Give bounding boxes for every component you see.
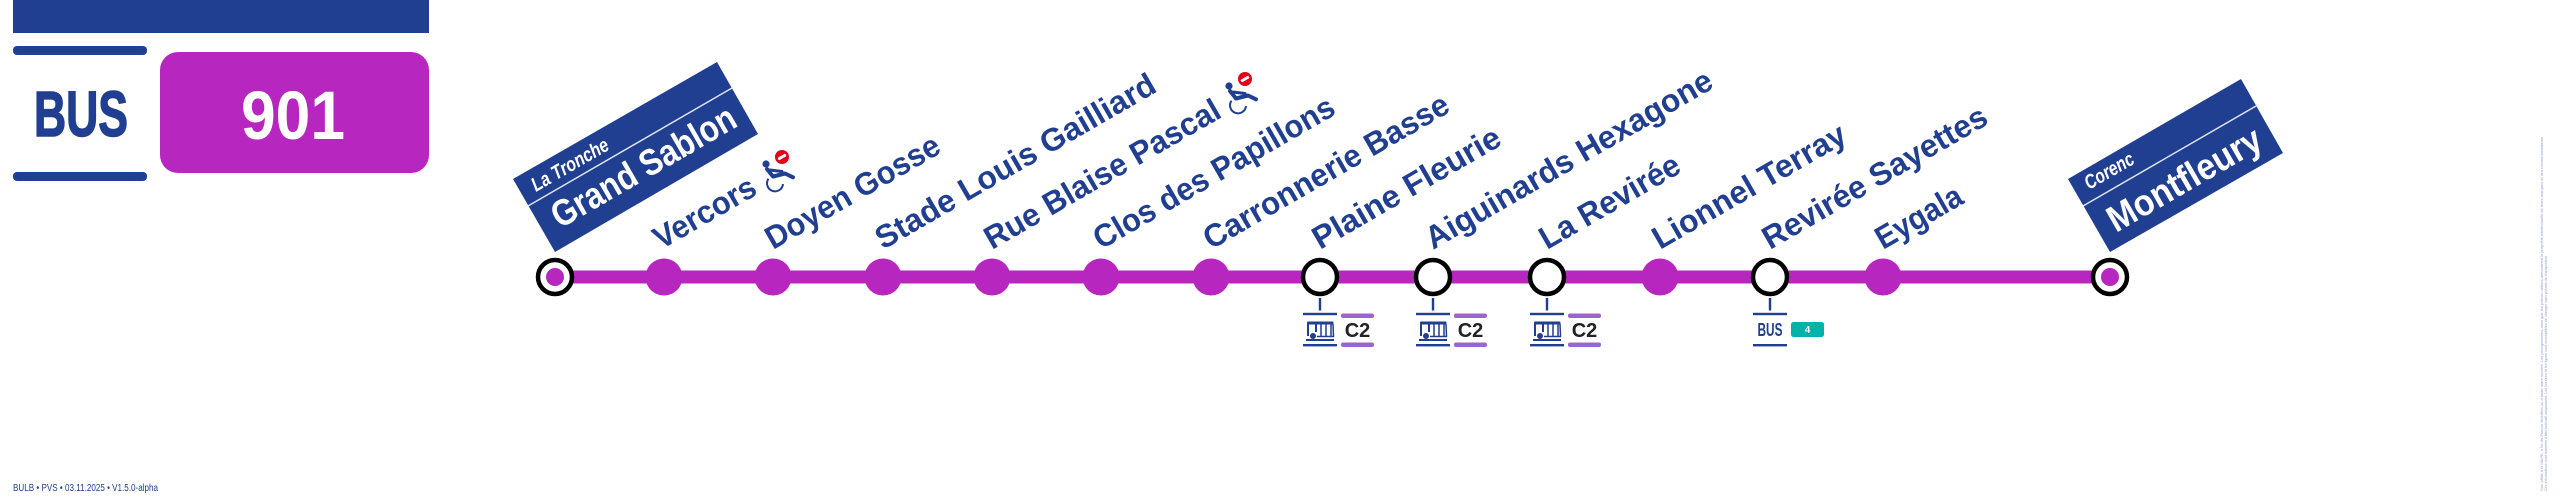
- terminus: Montfleury: [2068, 79, 2283, 252]
- icon: wheelchair not accessible, Vercors: [762, 150, 793, 191]
- route line: [555, 270, 2110, 284]
- vertical legal notice: Non affilié à la MAPE, à Île-de-France Mobilités ou à toute autre société. Les pictogrammes ainsi que les polices utilisés démontrent la propriété intellectuelle de leurs marques et des recommandations: [2539, 137, 2544, 491]
- stop label: Aiguinards Hexagone: Aiguinards Hexagone: [1418, 62, 1719, 256]
- top header band: [13, 0, 429, 33]
- line number badge: 901: 901: [241, 77, 345, 154]
- stop label: Clos des Papillons: Clos des Papillons: [1086, 88, 1341, 256]
- terminus: Montfleury: Corenc: [2080, 148, 2138, 194]
- connection: tram C2 at Plaine Fleurie: [1303, 298, 1374, 347]
- vertical legal notice: [2539, 137, 2548, 491]
- footer version text: BULB • PVS • 03.11.2025 • V1.5.0-alpha: [13, 483, 158, 494]
- terminus: Grand Sablon: [513, 62, 758, 252]
- stop label: Plaine Fleurie: Plaine Fleurie: [1306, 119, 1507, 256]
- stop label: Doyen Gosse: Doyen Gosse: [758, 127, 946, 256]
- stop label: Lionnel Terray: Lionnel Terray: [1646, 116, 1852, 256]
- stop label: Revirée Sayettes: Revirée Sayettes: [1756, 98, 1993, 256]
- connection: tram C2 at Aiguinards Hexagone: [1416, 298, 1487, 347]
- connection: tram C2 at La Revirée: [1530, 298, 1601, 347]
- stop label: Vercors: Vercors: [646, 168, 762, 256]
- icon: wheelchair not accessible, Rue Blaise Pascal: [1225, 72, 1256, 113]
- mode badge: BUS: BUS: [34, 78, 128, 150]
- terminus: Grand Sablon: Grand Sablon: [544, 97, 743, 236]
- stop label: Eygala: Eygala: [1868, 177, 1969, 256]
- stop label: Carronnerie Basse: Carronnerie Basse: [1196, 86, 1455, 256]
- connection: bus 4 at Revirée Sayettes: 4: [1805, 325, 1811, 336]
- terminus: Grand Sablon: La Tronche: [528, 134, 613, 196]
- stop label: Stade Louis Gailliard: Stade Louis Gailliard: [868, 66, 1162, 256]
- vertical legal notice: Ces informations sont données à titre indicatif uniquement. Les horaires et les lignes sont susceptibles de changer sans préavis du transporteur.: [2543, 255, 2548, 491]
- stops: terminus and interchange rings, plain stops: [538, 258, 2127, 296]
- stop label: La Revirée: La Revirée: [1532, 146, 1686, 256]
- mode badge: BUS: [13, 46, 147, 181]
- terminus: Montfleury: Montfleury: [2100, 118, 2269, 240]
- line number badge: 901: [160, 52, 429, 173]
- connection: bus 4 at Revirée Sayettes: [1753, 298, 1824, 346]
- connection: bus 4 at Revirée Sayettes: BUS: [1758, 320, 1782, 340]
- stop label: Rue Blaise Pascal: Rue Blaise Pascal: [978, 91, 1227, 256]
